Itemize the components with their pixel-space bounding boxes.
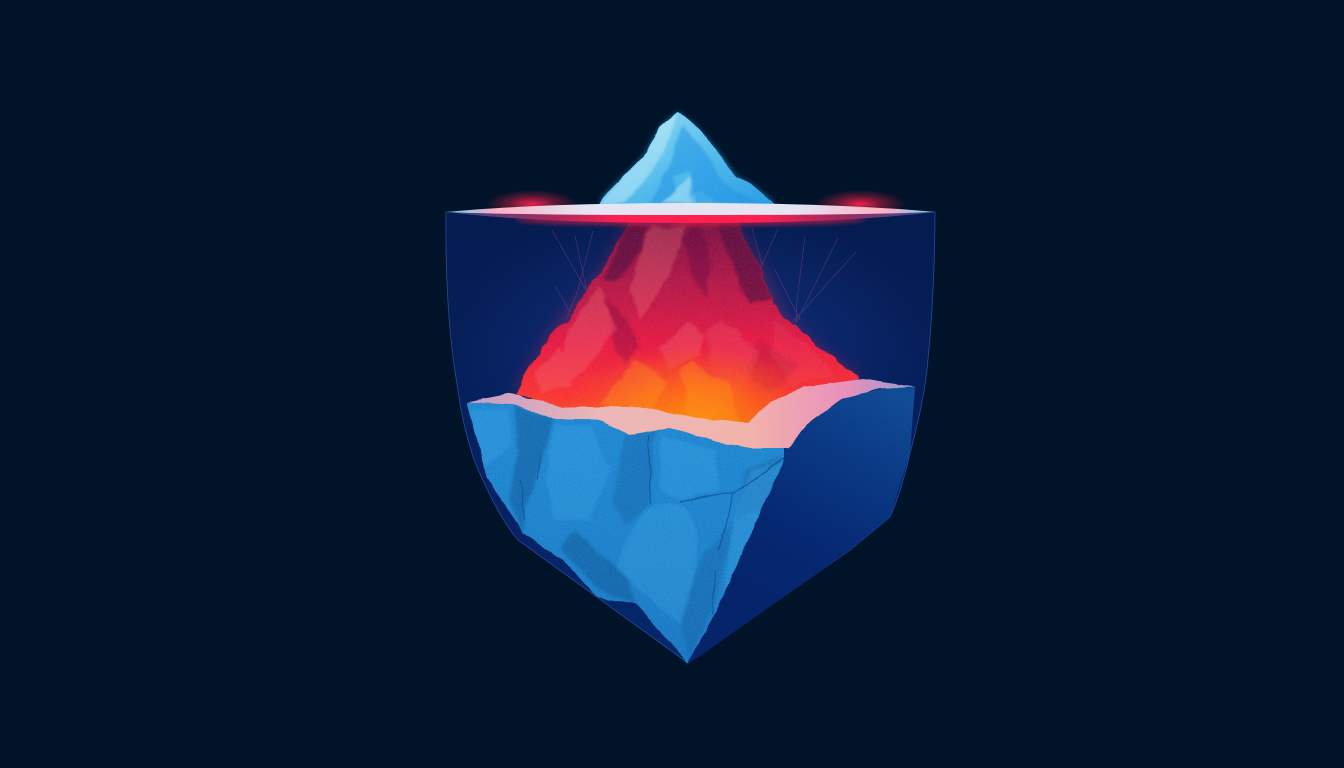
- ice block with snow top: [460, 379, 915, 670]
- mountain shadow facets: [603, 223, 800, 395]
- water glow around mountain: [447, 214, 934, 444]
- thin crack lines in water: [552, 228, 856, 395]
- ice cracks: [520, 435, 783, 615]
- water container shield: [446, 212, 935, 663]
- ice grain: [460, 395, 790, 670]
- snow surface of ice block: [467, 379, 915, 448]
- mountain grain: [518, 223, 859, 422]
- mountain red glow: [515, 223, 860, 424]
- tip shaded faces: [650, 125, 760, 203]
- orange glow at mountain base: [592, 351, 788, 423]
- waterline disc: [447, 190, 935, 226]
- above-water iceberg tip: [595, 108, 780, 206]
- tip light ridges: [600, 112, 722, 205]
- mountain light facets: [535, 225, 835, 400]
- ice rock shadow facets: [510, 405, 783, 660]
- underwater red mountain: [516, 222, 860, 423]
- tip grain: [604, 113, 772, 204]
- front ice block: [460, 395, 790, 670]
- right darker ice facet: [688, 387, 915, 663]
- disc red glows: [486, 190, 578, 218]
- iceberg infographic illustration: [446, 110, 936, 664]
- ice rock light facets: [470, 410, 783, 625]
